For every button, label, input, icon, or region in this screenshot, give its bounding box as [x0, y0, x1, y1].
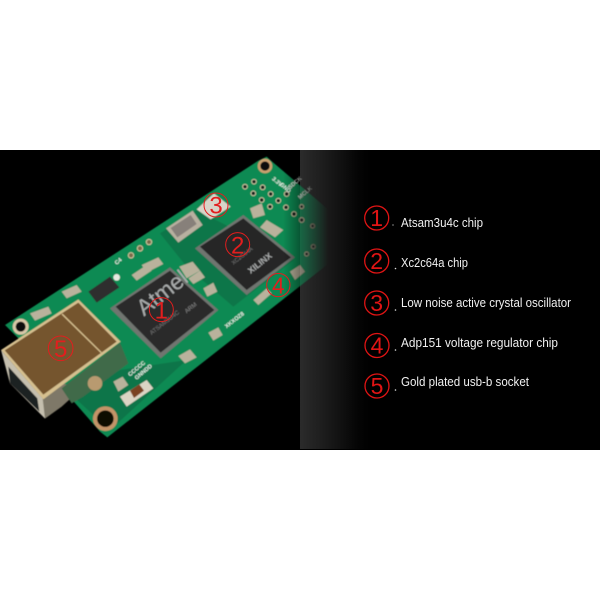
crystal oscillator can: [166, 211, 203, 243]
legend item 3: 3: [370, 290, 383, 316]
legend item 1: 1: [370, 205, 383, 231]
marker 1: [149, 297, 173, 324]
marker 3: [204, 193, 228, 220]
silkscreen labels: GND: [278, 182, 292, 195]
marker 5: 5: [54, 336, 67, 363]
legend item 5: [365, 373, 529, 399]
oscillator part 3: [197, 193, 231, 219]
silkscreen labels: CCCCC: [127, 360, 147, 378]
board body: [5, 157, 337, 437]
mounting holes: [13, 159, 272, 431]
chip 2: Xilinx: XC2C64A: [231, 246, 255, 267]
marker 1: 1: [155, 297, 168, 324]
legend item 4: [365, 332, 558, 358]
marker 4: [267, 272, 290, 298]
marker 3: 3: [209, 193, 223, 220]
white LED: [113, 274, 120, 281]
marker 2: [226, 232, 250, 259]
small header pads: [128, 239, 152, 258]
header pin holes: [243, 179, 315, 256]
legend item 1: [365, 205, 483, 231]
chip 2: Xilinx: [195, 215, 295, 295]
SMD pads and parts: [30, 203, 305, 392]
silkscreen labels: 3.3V: [270, 176, 283, 188]
marker 5: [48, 336, 73, 363]
marker circles on the photo: [48, 193, 290, 363]
legend item 2: 2: [370, 248, 383, 274]
USB-B socket: [1, 299, 128, 419]
chip 2: Xilinx: XILINX: [246, 250, 274, 276]
legend item 3: [365, 290, 572, 316]
legend item 1: Atsam3u4c chip: [401, 215, 483, 230]
marker 2: 2: [231, 232, 244, 259]
chip 1: Atmel: ATSAM3U4C: [149, 310, 181, 337]
grey gradient strip: [300, 150, 372, 449]
electrolytic/SMD resistor: [120, 380, 153, 407]
chip 1: Atmel: ARM: [184, 302, 198, 315]
photo: PCB board: [1, 157, 337, 437]
silkscreen labels: XKXOZ8: [224, 311, 246, 330]
marker 4: 4: [272, 272, 285, 298]
silkscreen labels: SDCK: [287, 175, 304, 191]
legend item 3: Low noise active crystal oscillator: [401, 295, 572, 310]
legend list: [365, 205, 572, 399]
small regulator IC: [88, 277, 119, 303]
infographic canvas: [0, 150, 600, 450]
legend item 5: Gold plated usb-b socket: [401, 374, 529, 389]
chip 1: Atmel: [110, 264, 218, 358]
silkscreen labels: C4: [114, 257, 124, 267]
black banner background: [0, 150, 600, 450]
legend item 2: [365, 248, 468, 274]
legend item 2: Xc2c64a chip: [401, 255, 468, 270]
legend item 5: 5: [371, 373, 383, 399]
legend item 4: Adp151 voltage regulator chip: [401, 335, 558, 350]
silkscreen labels: [114, 175, 314, 382]
chip 1: Atmel: Atmel: [131, 264, 193, 321]
silkscreen labels: GNNDD: [134, 364, 154, 382]
legend item 4: 4: [371, 332, 384, 358]
darker copper regions: [160, 210, 293, 307]
silkscreen labels: MCLK: [297, 185, 314, 201]
